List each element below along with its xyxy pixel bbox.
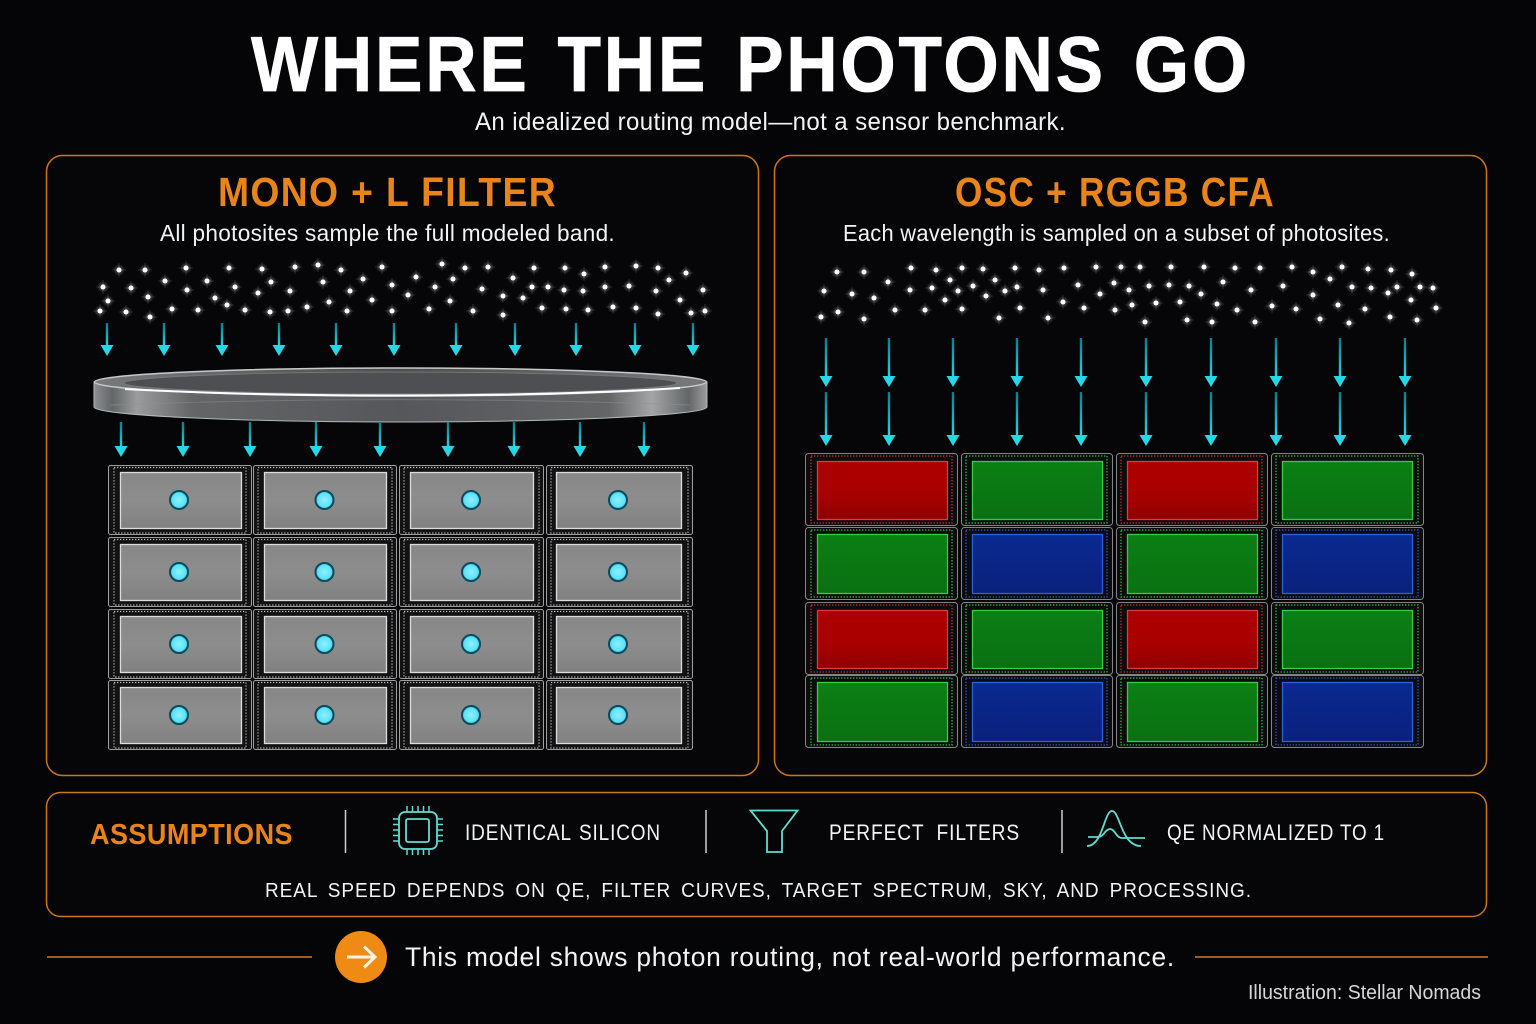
heading: mono: MONO + L FILTER [218, 169, 557, 215]
arrows: photons to color filter array [820, 338, 1412, 446]
panel: mono + L filter [46, 156, 758, 776]
credit: Illustration: Stellar Nomads [1248, 982, 1481, 1004]
panel: assumptions [46, 792, 1486, 916]
icon: orange arrow circle [335, 931, 387, 983]
assumptions heading: ASSUMPTIONS [90, 819, 293, 851]
luminance filter disc [94, 368, 707, 422]
photosite grid: mono [108, 466, 692, 750]
panel: OSC + RGGB CFA [774, 156, 1486, 776]
photon star field: mono [93, 257, 712, 324]
description: mono: All photosites sample the full modeled band. [160, 220, 615, 246]
icon: filter funnel [750, 810, 798, 852]
heading: OSC: OSC + RGGB CFA [955, 169, 1275, 215]
label: identical silicon: IDENTICAL SILICON [465, 820, 661, 845]
arrows: photons to filter [100, 323, 700, 356]
label: perfect filters: PERFECT FILTERS [829, 820, 1020, 845]
takeaway: This model shows photon routing, not real-world performance. [405, 942, 1175, 972]
label: QE normalized: QE NORMALIZED TO 1 [1167, 820, 1385, 845]
photon star field: OSC [814, 260, 1443, 330]
icon: QE curve [1087, 811, 1145, 846]
icon: silicon chip [393, 806, 443, 855]
caveat line: REAL SPEED DEPENDS ON QE, FILTER CURVES, TARGET SPECTRUM, SKY, AND PROCESSING. [265, 880, 1252, 902]
description: OSC: Each wavelength is sampled on a subset of photosites. [843, 220, 1390, 246]
subtitle: An idealized routing model—not a sensor benchmark. [475, 108, 1066, 136]
RGGB photosite grid [806, 454, 1424, 748]
title: WHERE THE PHOTONS GO [251, 20, 1250, 108]
arrows: filter to photosites [114, 422, 650, 457]
